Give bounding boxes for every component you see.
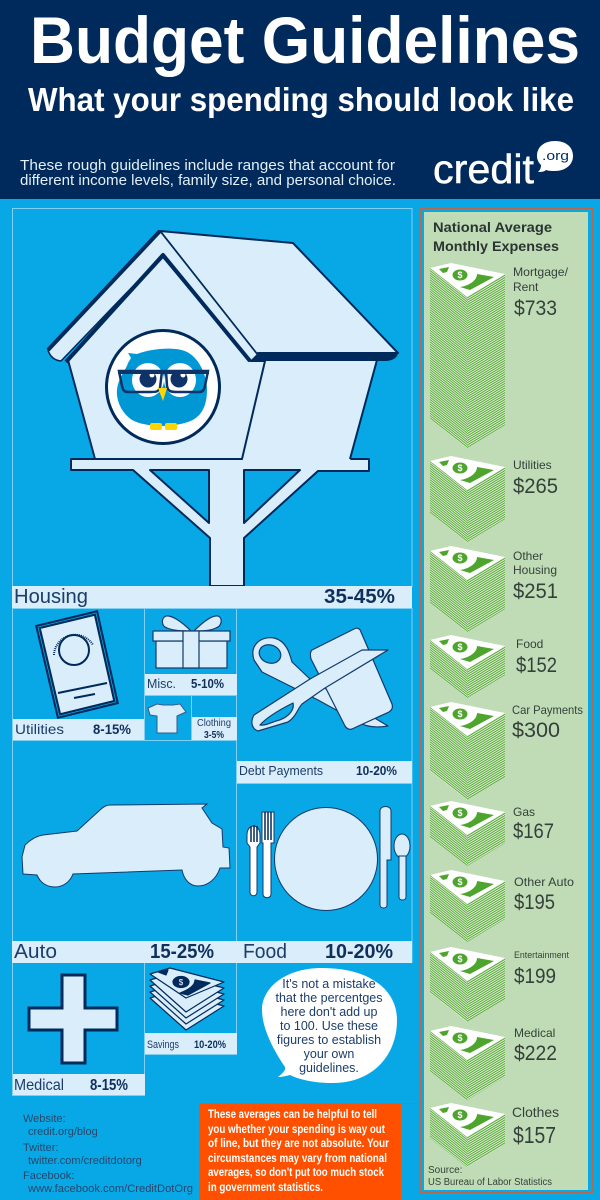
panel: national average monthly expenses — [401, 208, 592, 1192]
panel: savings — [145, 968, 237, 1054]
intro text: different income levels, family size, and personal choice. — [20, 173, 396, 189]
medical label: Medical — [14, 1077, 64, 1094]
links: website, twitter, facebook — [23, 1113, 193, 1195]
intro text: These rough guidelines include ranges that account for — [20, 158, 395, 174]
expense: food: Food — [516, 637, 543, 651]
callout: orange note: These averages can be helpful to tell — [208, 1109, 377, 1121]
panel: debt payments — [237, 628, 412, 783]
callout: speech bubble: It's not a mistake — [282, 977, 376, 991]
logo: credit.org: credit — [433, 146, 535, 192]
utilities label — [13, 719, 144, 740]
expense: mortgage/rent: $ — [457, 270, 463, 280]
title: Budget Guidelines — [30, 3, 580, 77]
debt payments label: 10-20% — [356, 763, 397, 778]
expense: food: $ — [457, 642, 463, 652]
expense: clothes: $157 — [513, 1122, 556, 1148]
callout: orange note: circumstances may vary from national — [208, 1153, 387, 1165]
header — [0, 0, 600, 199]
housing label: 35-45% — [324, 586, 395, 608]
expense: other housing: $251 — [513, 580, 558, 603]
expense: car payments: Car Payments — [512, 703, 583, 717]
utilities label: Utilities — [15, 721, 64, 737]
icon: stack of bills: $ — [179, 978, 184, 987]
expense: other auto — [430, 870, 574, 942]
links: website, twitter, facebook: twitter.com/creditdotorg — [28, 1155, 142, 1167]
callout: orange note: of line, but they are not absolute. Your — [208, 1138, 389, 1150]
icon: t-shirt — [148, 704, 186, 733]
expense: food: $152 — [516, 654, 557, 677]
clothing label — [192, 717, 237, 741]
panel: auto — [12, 804, 237, 963]
callout: speech bubble: here don't add up — [281, 1005, 377, 1019]
panel heading: National Average — [433, 219, 552, 235]
misc label: Misc. — [147, 676, 176, 691]
callout: speech bubble: to 100. Use these — [280, 1019, 378, 1033]
expense: car payments: $300 — [512, 719, 560, 742]
expense: car payments: $ — [457, 709, 463, 719]
panel heading: Monthly Expenses — [433, 238, 559, 254]
clothing label: 3-5% — [204, 730, 224, 741]
links: website, twitter, facebook: Twitter: — [23, 1142, 58, 1154]
panel heading — [433, 219, 559, 254]
expense: car payments — [430, 702, 583, 800]
expense: entertainment — [430, 947, 569, 1022]
expense: clothes: $ — [457, 1110, 463, 1120]
expense: gas: $ — [457, 808, 463, 818]
expense: gas — [430, 801, 554, 866]
source note: Source: — [428, 1165, 462, 1176]
icon: owl in birdhouse opening — [106, 330, 220, 444]
intro text — [20, 158, 396, 189]
debt payments label: Debt Payments — [239, 763, 323, 778]
misc label — [145, 674, 237, 695]
icon: car silhouette — [22, 804, 230, 887]
expense: utilities — [430, 456, 558, 542]
expense: medical: Medical — [514, 1026, 555, 1040]
links: website, twitter, facebook: www.facebook.com/CreditDotOrg — [27, 1183, 193, 1195]
auto label — [12, 941, 237, 963]
debt payments label — [237, 761, 412, 783]
icon: birdhouse — [48, 231, 398, 586]
expense: other housing: $ — [457, 553, 463, 563]
expense: mortgage/rent: $733 — [514, 297, 557, 320]
callout: speech bubble — [262, 968, 397, 1083]
savings label: Savings — [147, 1039, 179, 1051]
callout: orange note — [199, 1103, 401, 1200]
expense: other housing: Housing — [513, 563, 557, 577]
panel: food — [237, 806, 412, 963]
source note — [428, 1165, 552, 1188]
expense: entertainment: $ — [457, 954, 463, 964]
medical label — [13, 1074, 145, 1095]
expense: medical — [430, 1026, 557, 1100]
housing label: Housing — [14, 586, 88, 608]
expense: mortgage/rent — [430, 263, 569, 448]
icon: utility meter — [38, 613, 116, 716]
auto label: Auto — [14, 941, 57, 963]
expense: mortgage/rent: Mortgage/ — [513, 265, 569, 279]
logo: credit.org: .org — [542, 148, 569, 163]
callout: speech bubble: your own — [304, 1047, 354, 1061]
expense: other housing: Other — [513, 549, 543, 563]
links: website, twitter, facebook: Website: — [23, 1113, 66, 1125]
auto label: 15-25% — [150, 941, 214, 963]
expense: medical: $222 — [514, 1042, 557, 1065]
expense: entertainment: $199 — [514, 965, 556, 988]
panel: clothing — [148, 704, 237, 741]
icon: medical cross — [29, 975, 117, 1063]
panel: utilities — [13, 613, 144, 740]
panel: medical — [13, 975, 145, 1095]
panel: misc — [145, 616, 237, 695]
expense: other auto: $195 — [514, 891, 555, 914]
food label: Food — [243, 941, 287, 963]
source note: US Bureau of Labor Statistics — [428, 1177, 552, 1188]
expense: utilities: $ — [457, 463, 463, 473]
expense: clothes — [430, 1103, 559, 1167]
icon: scissors cutting card — [252, 628, 392, 731]
expense: other housing — [430, 546, 558, 632]
expense: other auto: $ — [457, 877, 463, 887]
expense: entertainment: Entertainment — [514, 950, 569, 960]
expense: other auto: Other Auto — [514, 875, 574, 889]
food label: 10-20% — [325, 941, 393, 963]
callout: orange note: averages, so don't put too much stock — [208, 1167, 384, 1179]
medical label: 8-15% — [90, 1077, 128, 1094]
savings label — [145, 1033, 237, 1054]
panel: budget treemap outlines — [12, 208, 412, 1096]
expense: clothes: Clothes — [512, 1104, 559, 1120]
expense: utilities: $265 — [513, 475, 558, 498]
callout: orange note: in government statistics. — [208, 1182, 323, 1194]
savings label: 10-20% — [194, 1039, 226, 1051]
callout: speech bubble: that the percentges — [275, 991, 383, 1005]
icon: place setting — [247, 806, 410, 910]
logo: credit.org — [433, 141, 573, 192]
subtitle: What your spending should look like — [28, 81, 574, 118]
misc label: 5-10% — [191, 676, 224, 691]
icon: gift box — [153, 616, 230, 668]
callout: speech bubble: guidelines. — [299, 1061, 359, 1075]
food label — [237, 941, 412, 963]
housing label — [12, 586, 412, 608]
expense: gas: Gas — [513, 805, 535, 819]
utilities label: 8-15% — [93, 721, 132, 737]
expense: mortgage/rent: Rent — [513, 280, 539, 294]
expense: food — [430, 635, 557, 698]
clothing label: Clothing — [197, 718, 231, 729]
callout: speech bubble: figures to establish — [277, 1033, 381, 1047]
expense: medical: $ — [457, 1033, 463, 1043]
links: website, twitter, facebook: Facebook: — [23, 1170, 74, 1182]
panel: housing — [12, 231, 412, 608]
callout: orange note: you whether your spending is way out — [208, 1124, 385, 1136]
links: website, twitter, facebook: credit.org/blog — [28, 1126, 98, 1138]
expense: gas: $167 — [513, 820, 554, 843]
expense: utilities: Utilities — [513, 458, 552, 472]
